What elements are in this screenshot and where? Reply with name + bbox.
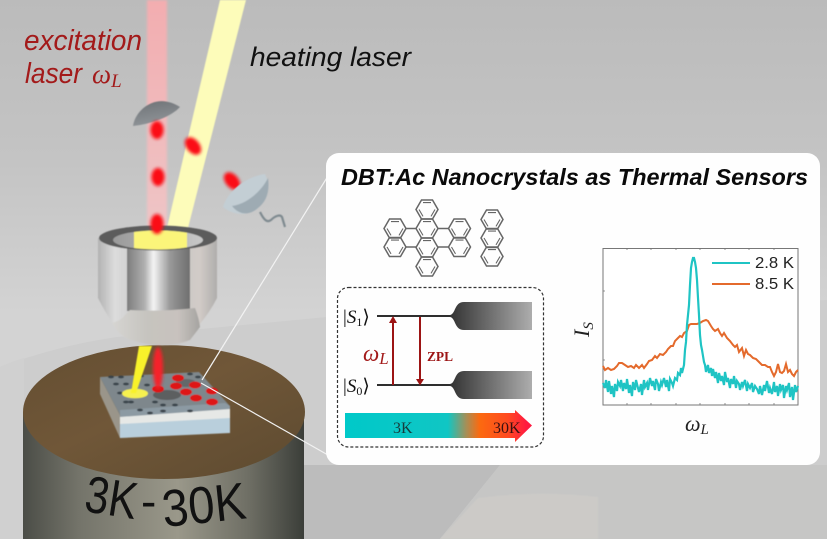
mirror [133,101,180,126]
spectrum chart [569,248,798,438]
y axis label: I [569,330,594,337]
label: excitation laser: ω [92,59,111,89]
curve: 8.5 K [603,320,798,376]
top red spot over objective rim [150,214,164,234]
curve: 2.8 K [603,258,798,400]
sample surface dots [108,373,201,414]
temperature arrow: 30K [493,420,521,437]
panel title: DBT:Ac Nanocrystals as Thermal Sensors [341,164,808,190]
cryostat cylinder [23,345,305,539]
label: excitation laser: excitation [24,25,142,57]
S0 level: 0 [356,384,362,398]
heating spot [122,389,148,398]
arrow: ZPL [416,317,424,386]
molecule: DBT [384,200,470,276]
S0 level [343,371,532,399]
x axis label: ω [685,411,701,436]
label: heating laser: heating laser [250,42,412,72]
focused beams below objective [131,346,163,393]
label: temperature range: 3K [81,466,142,531]
temperature arrow [345,410,532,442]
S1 level: 1 [356,315,362,329]
label: temperature range: 30K [159,472,249,539]
detector [223,174,285,227]
molecule: anthracene [481,210,503,266]
red laser spots [150,121,243,193]
energy level diagram [338,288,544,447]
callout lines [201,176,328,455]
legend: 8.5 K [755,276,794,293]
temperature arrow: 3K [393,420,413,437]
S1 level: |S [343,307,356,328]
axis ticks [603,248,774,405]
S0 level: |S [343,376,356,397]
label: excitation laser: laser [25,58,83,90]
excitation laser beam [147,0,167,240]
label: temperature range: - [141,475,156,527]
legend: 2.8 K [755,255,794,272]
label: omega L: L [378,349,389,368]
panel [326,153,820,465]
sample [100,372,230,438]
label: ZPL: ZPL [427,349,453,364]
arrow: excitation [389,316,397,385]
red nanocrystals [152,374,218,406]
legend [712,255,794,293]
S1 level [343,302,532,330]
S0 level: ⟩ [362,376,370,397]
label: temperature range [81,466,249,539]
objective lens [98,226,217,345]
label: excitation laser [24,25,142,92]
label: omega L: ω [363,341,379,366]
y axis label: S [581,322,597,330]
heating laser beam [166,0,246,232]
label: excitation laser: L [110,71,122,92]
S1 level: ⟩ [362,307,370,328]
x axis label: L [700,422,709,438]
